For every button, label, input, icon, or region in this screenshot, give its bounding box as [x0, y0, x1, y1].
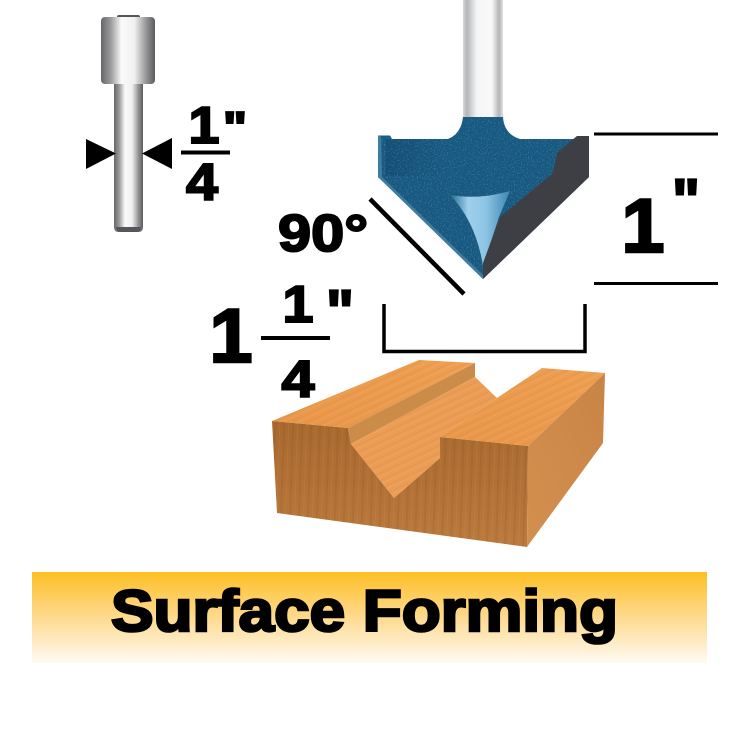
- shank numerator: 1: [188, 97, 220, 155]
- icon: shaft tip: [116, 227, 141, 232]
- shank inch mark: ": [223, 103, 247, 152]
- height dimension: [594, 132, 718, 285]
- wood top right grain: [440, 368, 605, 446]
- icon: shank cap: [117, 15, 140, 19]
- width bracket: [384, 304, 585, 352]
- groove lit wall: [351, 377, 497, 498]
- 90 degree angle line: [370, 199, 464, 294]
- dark carbide side: [483, 136, 589, 279]
- height bottom line: [594, 282, 718, 285]
- banner title: Surface Forming: [111, 579, 618, 644]
- router bit: [378, 0, 589, 279]
- width dimension: [210, 276, 585, 409]
- height top line: [594, 132, 718, 136]
- banner: [32, 572, 707, 663]
- groove lit wall grain: [351, 377, 497, 498]
- wood front face: [272, 421, 528, 547]
- darker band: [386, 139, 440, 176]
- shank size fraction: [181, 97, 247, 212]
- shank denominator: 4: [186, 154, 218, 212]
- shank fraction bar: [181, 150, 230, 154]
- bright blade edge: [378, 136, 483, 279]
- wood block with V groove: [272, 360, 605, 547]
- width fraction bar: [261, 336, 330, 340]
- height value: 1: [622, 184, 664, 269]
- wood right side: [527, 373, 605, 547]
- speckled surface: [378, 117, 589, 279]
- height inch mark: ": [672, 167, 700, 234]
- wood top right: [440, 368, 605, 446]
- width denominator: 4: [282, 351, 315, 409]
- groove shaded wall: [348, 363, 475, 444]
- highlight on cutter: [450, 191, 510, 266]
- icon: collet cylinder: [101, 17, 155, 84]
- banner background: [32, 572, 707, 663]
- bit shank: [463, 0, 503, 120]
- wood top left: [272, 360, 475, 428]
- small shank diagram: [86, 15, 172, 232]
- wood top left grain: [272, 360, 475, 428]
- wood front grain: [272, 421, 528, 547]
- icon: left arrow: [86, 139, 116, 169]
- bit neck and cutter body: [378, 117, 589, 279]
- angle label: 90°: [278, 205, 368, 263]
- icon: right arrow: [142, 138, 172, 169]
- icon: shank shaft: [114, 84, 143, 232]
- width whole number: 1: [210, 294, 252, 379]
- width numerator: 1: [282, 276, 314, 334]
- width inch mark: ": [326, 278, 354, 345]
